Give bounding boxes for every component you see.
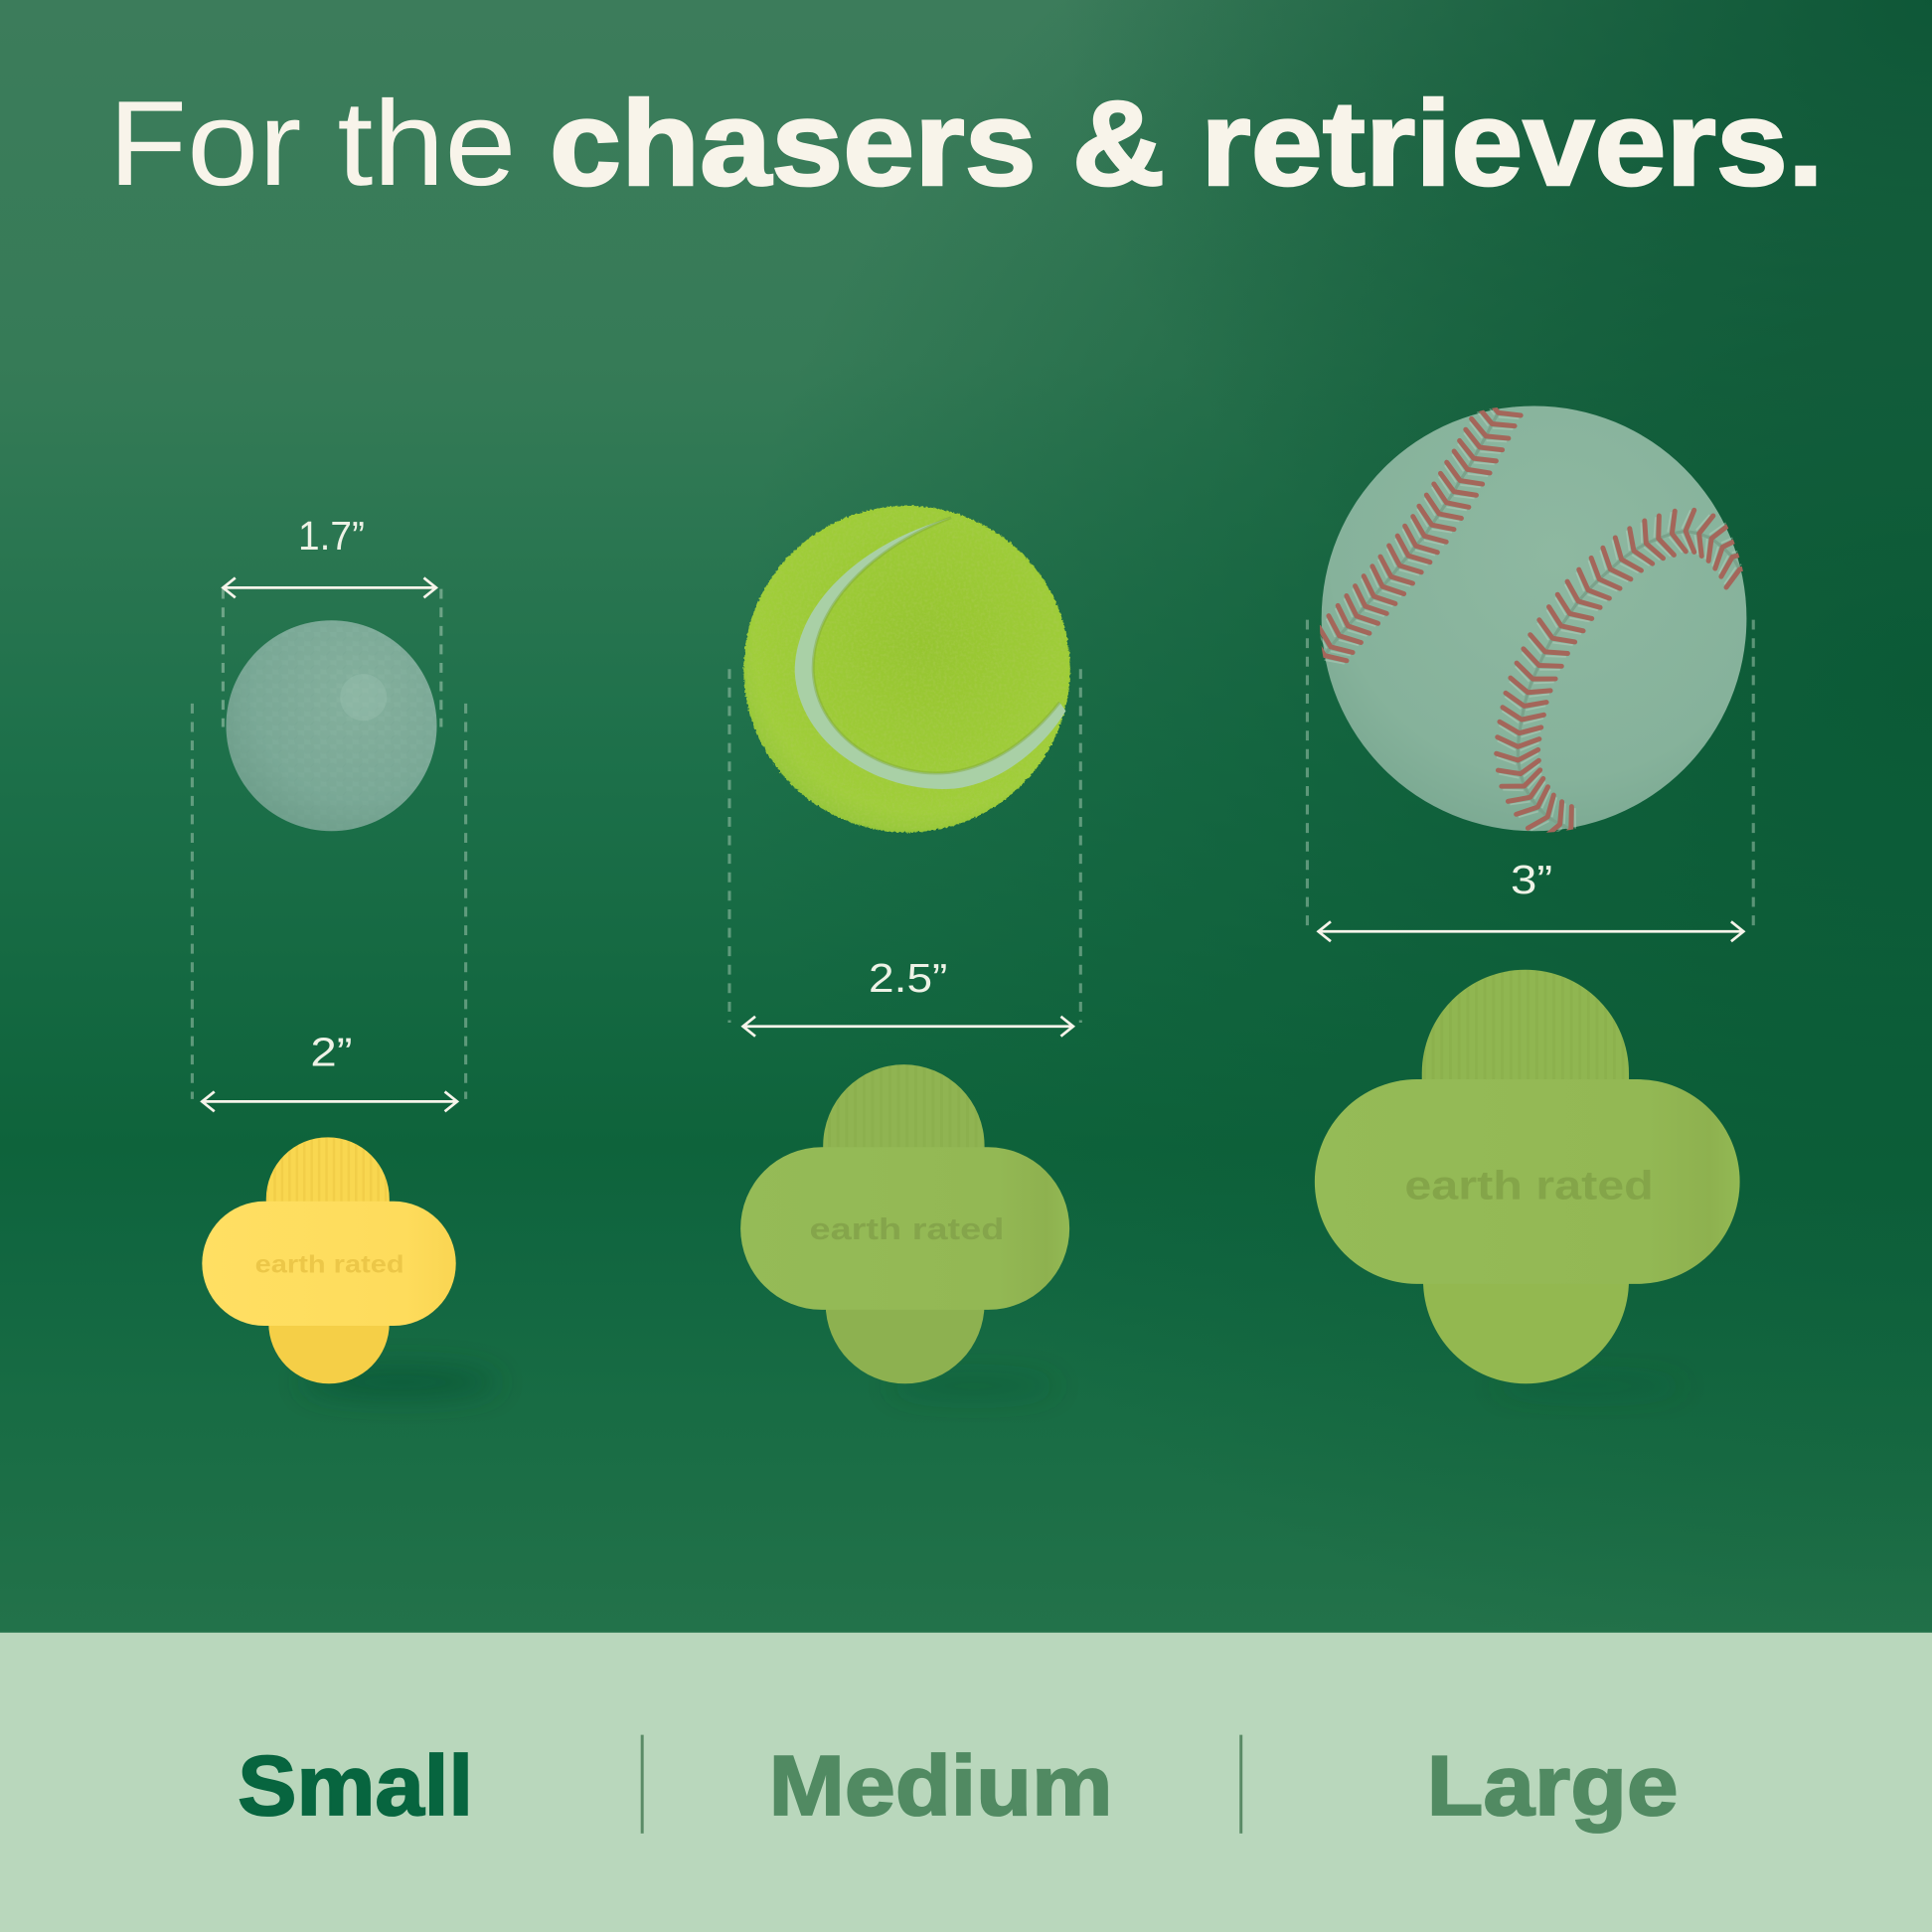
label: Medium: Medium (769, 1739, 1113, 1834)
panel: size labels (0, 1633, 1932, 1932)
divider left (641, 1735, 644, 1834)
large toy: translucent green: earth rated (1404, 1162, 1654, 1208)
label: Large: Large (1427, 1739, 1679, 1834)
baseball (1322, 406, 1746, 831)
small toy: yellow (202, 1137, 499, 1397)
dimension: medium toy width 2.5 inch: 2.5” (869, 955, 947, 1001)
medium toy: translucent green (740, 1064, 1069, 1398)
small toy: yellow: earth rated (255, 1252, 404, 1279)
dimension: small toy width 2 inch (192, 704, 466, 1111)
title: chasers & retrievers. (550, 76, 1824, 211)
tennis ball (743, 506, 1070, 832)
dimension: large toy width 3 inch (1307, 620, 1753, 941)
dimension: large toy width 3 inch: 3” (1511, 857, 1552, 902)
divider right (1239, 1735, 1242, 1834)
dimension: golf ball width 1.7 inch: 1.7” (298, 513, 365, 559)
dimension: small toy width 2 inch: 2” (310, 1029, 353, 1074)
stitched seams (1325, 412, 1740, 829)
dimension: medium toy width 2.5 inch (729, 669, 1080, 1037)
large toy: translucent green (1315, 970, 1740, 1397)
golf ball (227, 620, 437, 831)
title: For the (108, 76, 516, 211)
dimension: golf ball width 1.7 inch (223, 513, 441, 726)
medium toy: translucent green: earth rated (810, 1211, 1004, 1246)
label: Small: Small (238, 1739, 473, 1834)
title (108, 76, 1824, 211)
